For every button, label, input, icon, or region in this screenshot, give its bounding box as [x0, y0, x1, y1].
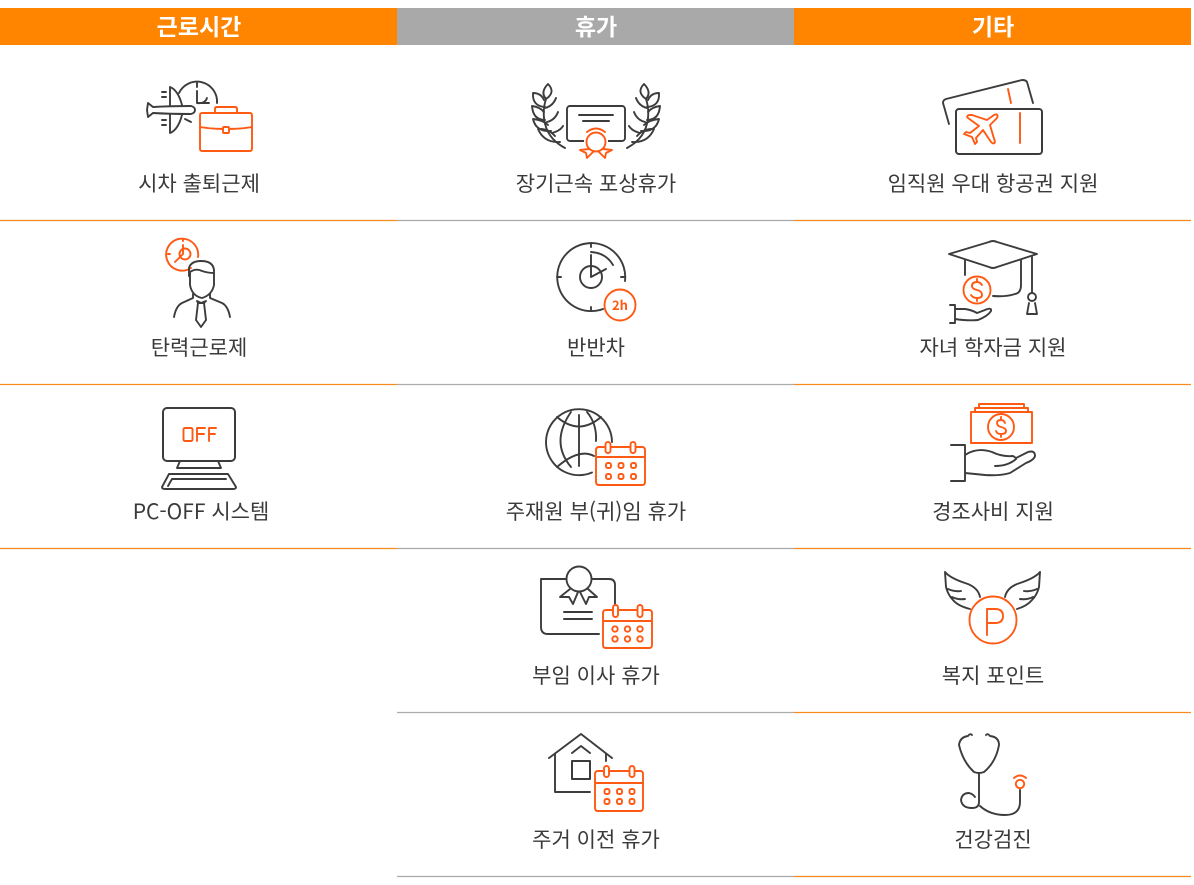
header: 기타 — [794, 8, 1191, 45]
icon: stethoscope — [959, 734, 1026, 815]
label: 복지 포인트: 복지 포인트 — [942, 660, 1044, 690]
icon: PC off monitor — [162, 408, 236, 489]
label: 자녀 학자금 지원: 자녀 학자금 지원 — [920, 332, 1066, 362]
icon: laurel and certificate — [532, 84, 660, 158]
icon: plane, clock and briefcase — [147, 82, 252, 151]
label: 반반차: 반반차 — [567, 332, 625, 362]
label: 건강검진: 건강검진 — [954, 824, 1032, 854]
label: 장기근속 포상휴가: 장기근속 포상휴가 — [516, 168, 676, 198]
icon: globe and calendar — [546, 409, 645, 485]
label: 주거 이전 휴가: 주거 이전 휴가 — [532, 824, 660, 854]
label: 시차 출퇴근제: 시차 출퇴근제 — [138, 168, 260, 198]
header: 휴가: 휴가 — [575, 8, 617, 42]
header: 기타: 기타 — [972, 8, 1014, 42]
icon: house and calendar — [549, 734, 643, 811]
label: PC-OFF 시스템: PC-OFF 시스템 — [133, 496, 269, 526]
icon: money and hand — [951, 404, 1035, 481]
label: 탄력근로제: 탄력근로제 — [151, 332, 247, 362]
icon: person with clock — [166, 239, 230, 327]
icon: clock 2h — [557, 243, 636, 320]
label: 부임 이사 휴가: 부임 이사 휴가 — [532, 660, 660, 690]
icon: graduation cap and coin — [949, 241, 1037, 323]
icon: clock 2h: 2h — [612, 295, 628, 314]
label: 임직원 우대 항공권 지원: 임직원 우대 항공권 지원 — [888, 168, 1098, 198]
icon: flight tickets — [943, 80, 1042, 154]
label: 경조사비 지원: 경조사비 지원 — [932, 496, 1054, 526]
header: 휴가 — [397, 8, 794, 45]
label: 주재원 부(귀)임 휴가: 주재원 부(귀)임 휴가 — [506, 496, 686, 526]
header: 근로시간: 근로시간 — [157, 8, 241, 42]
icon: certificate and calendar — [541, 566, 652, 648]
header: 근로시간 — [0, 8, 397, 45]
icon: winged point coin — [945, 572, 1040, 644]
